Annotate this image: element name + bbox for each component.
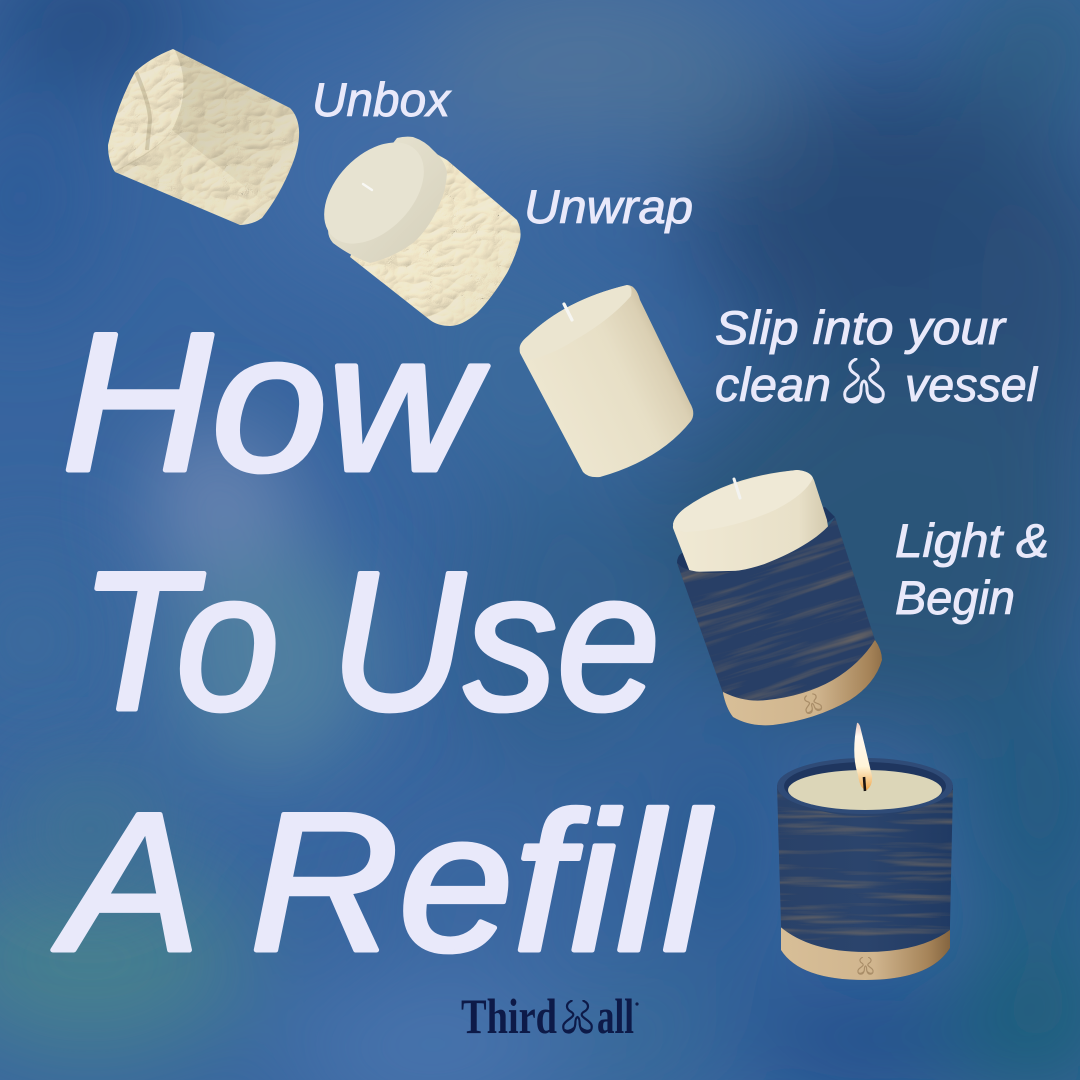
- icon: Third Wall mark: [845, 359, 883, 402]
- embossed mark on step 4 vessel: [802, 692, 822, 714]
- title: How To Use A Refill: How: [62, 292, 488, 512]
- title: How To Use A Refill: A Refill: [53, 772, 713, 992]
- step 5: lit candle in vessel: [770, 723, 960, 985]
- label: Slip into your clean vessel: Slip into your: [715, 301, 1007, 354]
- step 4: refill sliding into vessel: [672, 470, 882, 726]
- vessel with brushed glaze: [677, 518, 882, 726]
- step 3: bare refill candle: [520, 285, 693, 477]
- label: Unwrap: Unwrap: [524, 180, 693, 233]
- step 2: refill half unwrapped: [324, 136, 521, 326]
- wick of unwrapped refill: [363, 184, 372, 190]
- candle flame: [854, 723, 872, 791]
- label: Slip into your clean vessel: clean: [715, 358, 831, 411]
- label: Slip into your clean vessel: vessel: [905, 358, 1039, 411]
- title: How To Use A Refill: To Use: [80, 531, 660, 751]
- embossed vessel mark: [858, 957, 873, 974]
- vessel rim and wax: [777, 758, 953, 814]
- label: Light & Begin: [895, 514, 1049, 624]
- logo: Third Wall wordmark: all: [597, 988, 634, 1044]
- label: Slip into your clean vessel: [715, 301, 1039, 411]
- label: Unbox: Unbox: [312, 73, 452, 126]
- title: How To Use A Refill: [53, 292, 713, 992]
- step 1: boxed refill in wrapped paper: [108, 49, 300, 225]
- label: Light & Begin: Light &: [895, 514, 1049, 567]
- logo: Third Wall wordmark: Third: [461, 988, 557, 1044]
- label: Light & Begin: Begin: [895, 571, 1015, 624]
- wick of refill: [564, 304, 572, 320]
- wick: [734, 479, 740, 498]
